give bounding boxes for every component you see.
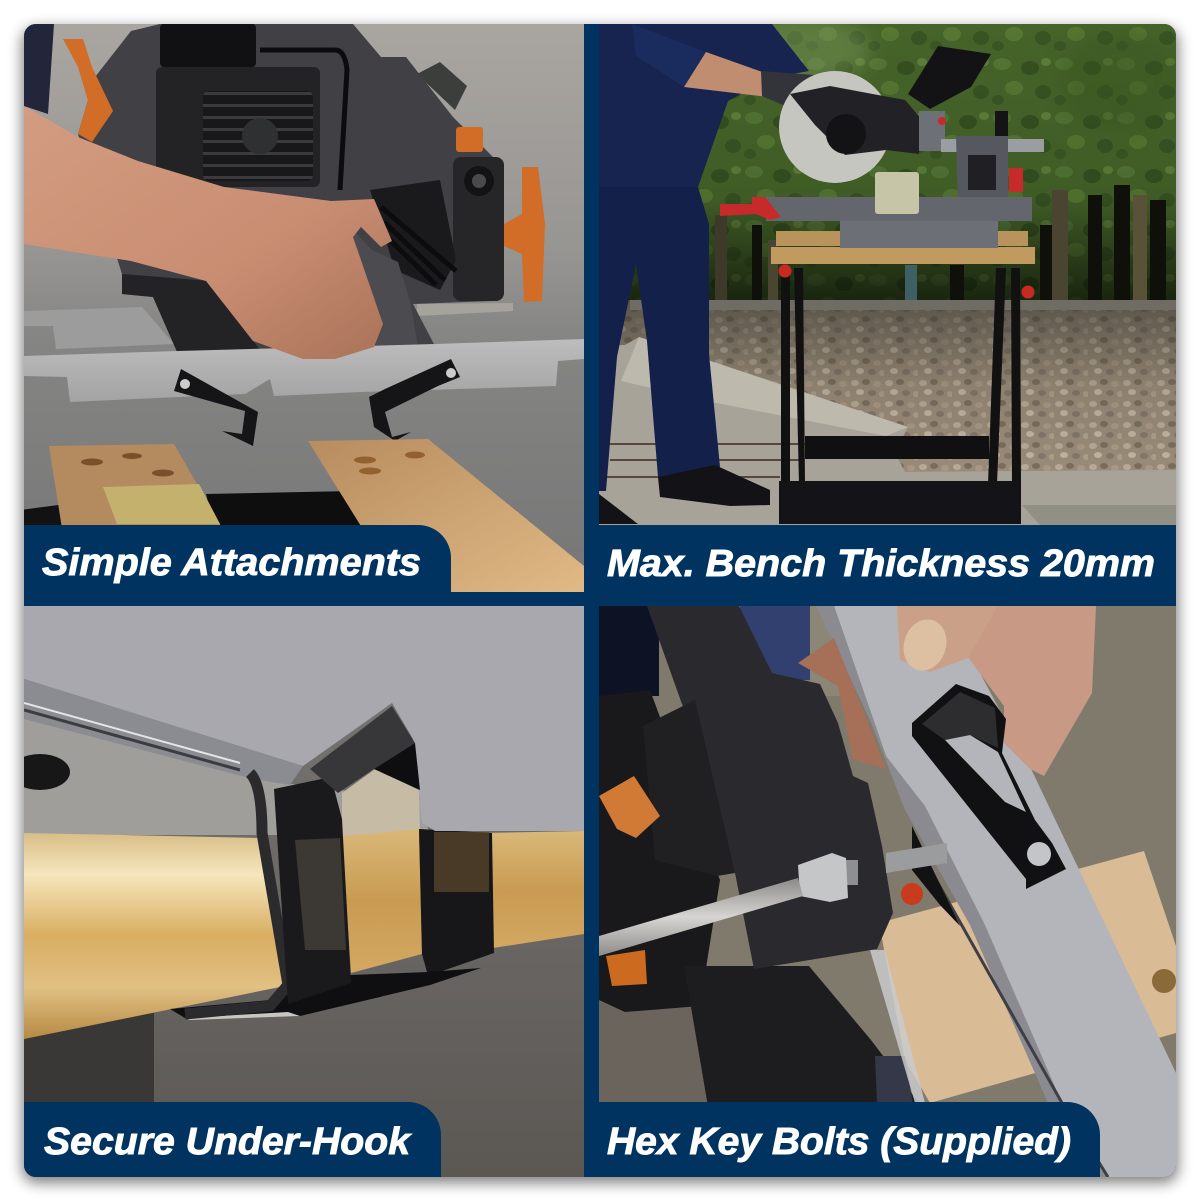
rear rail [24, 307, 174, 349]
person [599, 24, 832, 524]
blue sleeve [740, 606, 810, 680]
hand [798, 606, 1096, 776]
sleeve at top left [24, 24, 54, 114]
mitre saw [720, 46, 1044, 248]
hedge background [628, 24, 1176, 300]
panel: max bench thickness photo [599, 24, 1176, 525]
black hook band [274, 777, 351, 1004]
silver plate [24, 606, 584, 831]
dark column [24, 1012, 154, 1102]
black hook bracket [912, 684, 1066, 889]
tree trunks [715, 185, 1166, 300]
casting [647, 606, 893, 969]
silver hook arm [24, 679, 303, 785]
panel: hex key bolts photo [599, 606, 1176, 1177]
ground base [616, 337, 1172, 472]
caption: max bench thickness [585, 525, 1176, 606]
bolt [798, 843, 947, 902]
fold panel [310, 706, 415, 793]
caption: simple attachments: Simple Attachments [42, 542, 421, 584]
silver rail [834, 606, 1176, 1177]
hook base [170, 968, 481, 1018]
caption: max bench thickness: Max. Bench Thickness 20mm [607, 543, 1155, 585]
lower leg [684, 966, 925, 1177]
caption: secure under-hook: Secure Under-Hook [44, 1121, 412, 1163]
beige gap [342, 769, 420, 836]
orange knobs [599, 776, 660, 838]
hex key [599, 878, 803, 956]
dark sleeve [599, 606, 659, 696]
slot in backdrop [24, 754, 70, 790]
workbench [771, 231, 1035, 524]
black bracket behind rail [912, 826, 960, 926]
orange handles [63, 39, 545, 302]
saw body [78, 24, 504, 354]
gravel bed [599, 300, 1176, 472]
caption: simple attachments [24, 525, 584, 606]
wood block [879, 851, 1176, 1103]
rear hook [419, 829, 494, 976]
middle wood [342, 829, 422, 973]
hooks [174, 359, 460, 446]
front rail [24, 339, 584, 402]
panel: simple attachments photo [20, 24, 584, 592]
lighter backdrop top [810, 606, 840, 696]
right wood [489, 831, 584, 948]
panel: secure under-hook photo [10, 606, 584, 1177]
caption: hex key bolts: Hex Key Bolts (Supplied) [607, 1121, 1071, 1163]
caption: hex key bolts [585, 1102, 1100, 1177]
lower left floor [599, 1000, 720, 1177]
backdrop under plate [24, 715, 430, 835]
pavement [607, 337, 1176, 525]
caption: secure under-hook [24, 1102, 441, 1177]
dark mechanism left [599, 690, 720, 1012]
rail edge strip [816, 606, 1108, 1177]
workbench boards [20, 439, 584, 592]
hook wire [185, 773, 288, 1014]
arm and hand [24, 106, 392, 359]
left wood board [24, 833, 290, 1039]
